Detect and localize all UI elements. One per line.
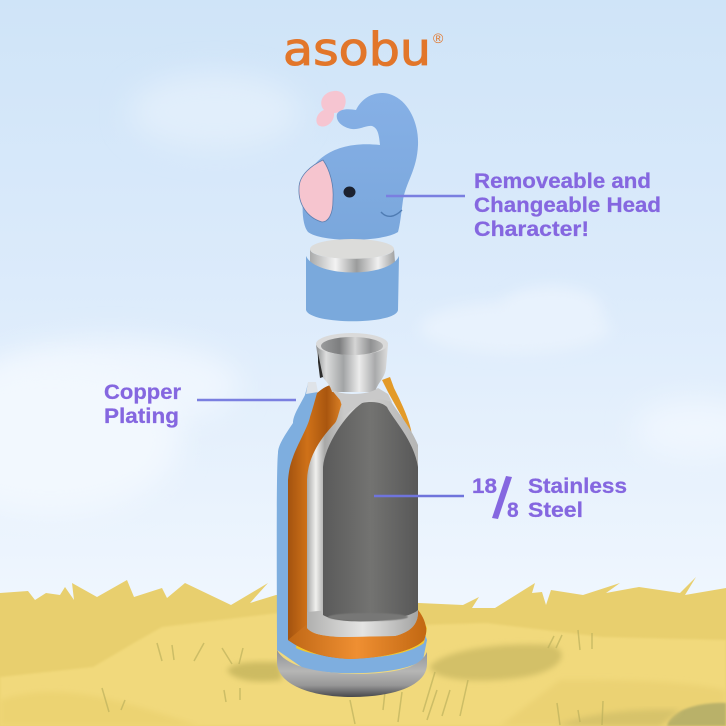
callout: head character: Character! bbox=[474, 218, 589, 241]
grass field bbox=[0, 577, 726, 726]
callout: head character: Changeable Head bbox=[474, 194, 661, 217]
callout: 18/8 stainless steel: Stainless bbox=[528, 475, 627, 498]
callout: copper plating bbox=[104, 381, 296, 428]
heart water spout bbox=[316, 91, 346, 127]
mouth bbox=[381, 210, 402, 216]
lower tone bbox=[0, 692, 200, 726]
head character: elephant bbox=[299, 91, 418, 240]
grass blades bbox=[102, 630, 603, 725]
collar ring bbox=[306, 239, 399, 321]
copper layer bbox=[288, 385, 426, 659]
callout: 18/8 stainless steel bbox=[374, 475, 627, 522]
inner gray cavity bbox=[323, 402, 418, 621]
gold edge bbox=[296, 612, 427, 658]
steel inner layer bbox=[307, 396, 418, 637]
clouds bbox=[0, 74, 726, 515]
callout: 18/8 stainless steel: 8 bbox=[507, 499, 519, 522]
callout: head character bbox=[386, 170, 661, 241]
steel base bbox=[277, 650, 427, 697]
logo: asobu: asobu bbox=[283, 23, 431, 76]
callout: 18/8 stainless steel: Steel bbox=[528, 499, 583, 522]
logo: asobu: ® bbox=[433, 30, 444, 46]
shell top highlight bbox=[306, 382, 318, 394]
light meadow bbox=[0, 613, 726, 726]
ear bbox=[299, 160, 333, 222]
right gold sliver bbox=[382, 377, 412, 435]
steel neck bbox=[316, 345, 388, 392]
callout: copper plating: Plating bbox=[104, 405, 179, 428]
elephant head and trunk bbox=[303, 93, 418, 240]
shaded patches bbox=[430, 644, 562, 681]
eye bbox=[344, 186, 356, 198]
callout: copper plating: Copper bbox=[104, 381, 181, 404]
bottle cutaway bbox=[277, 333, 427, 697]
outer blue shell bbox=[277, 383, 427, 673]
metal insert bbox=[310, 239, 394, 259]
neck opening bbox=[316, 333, 388, 355]
callout: head character: Removeable and bbox=[474, 170, 651, 193]
callout: 18/8 stainless steel: 18 bbox=[472, 475, 497, 498]
blue collar bbox=[306, 256, 399, 321]
